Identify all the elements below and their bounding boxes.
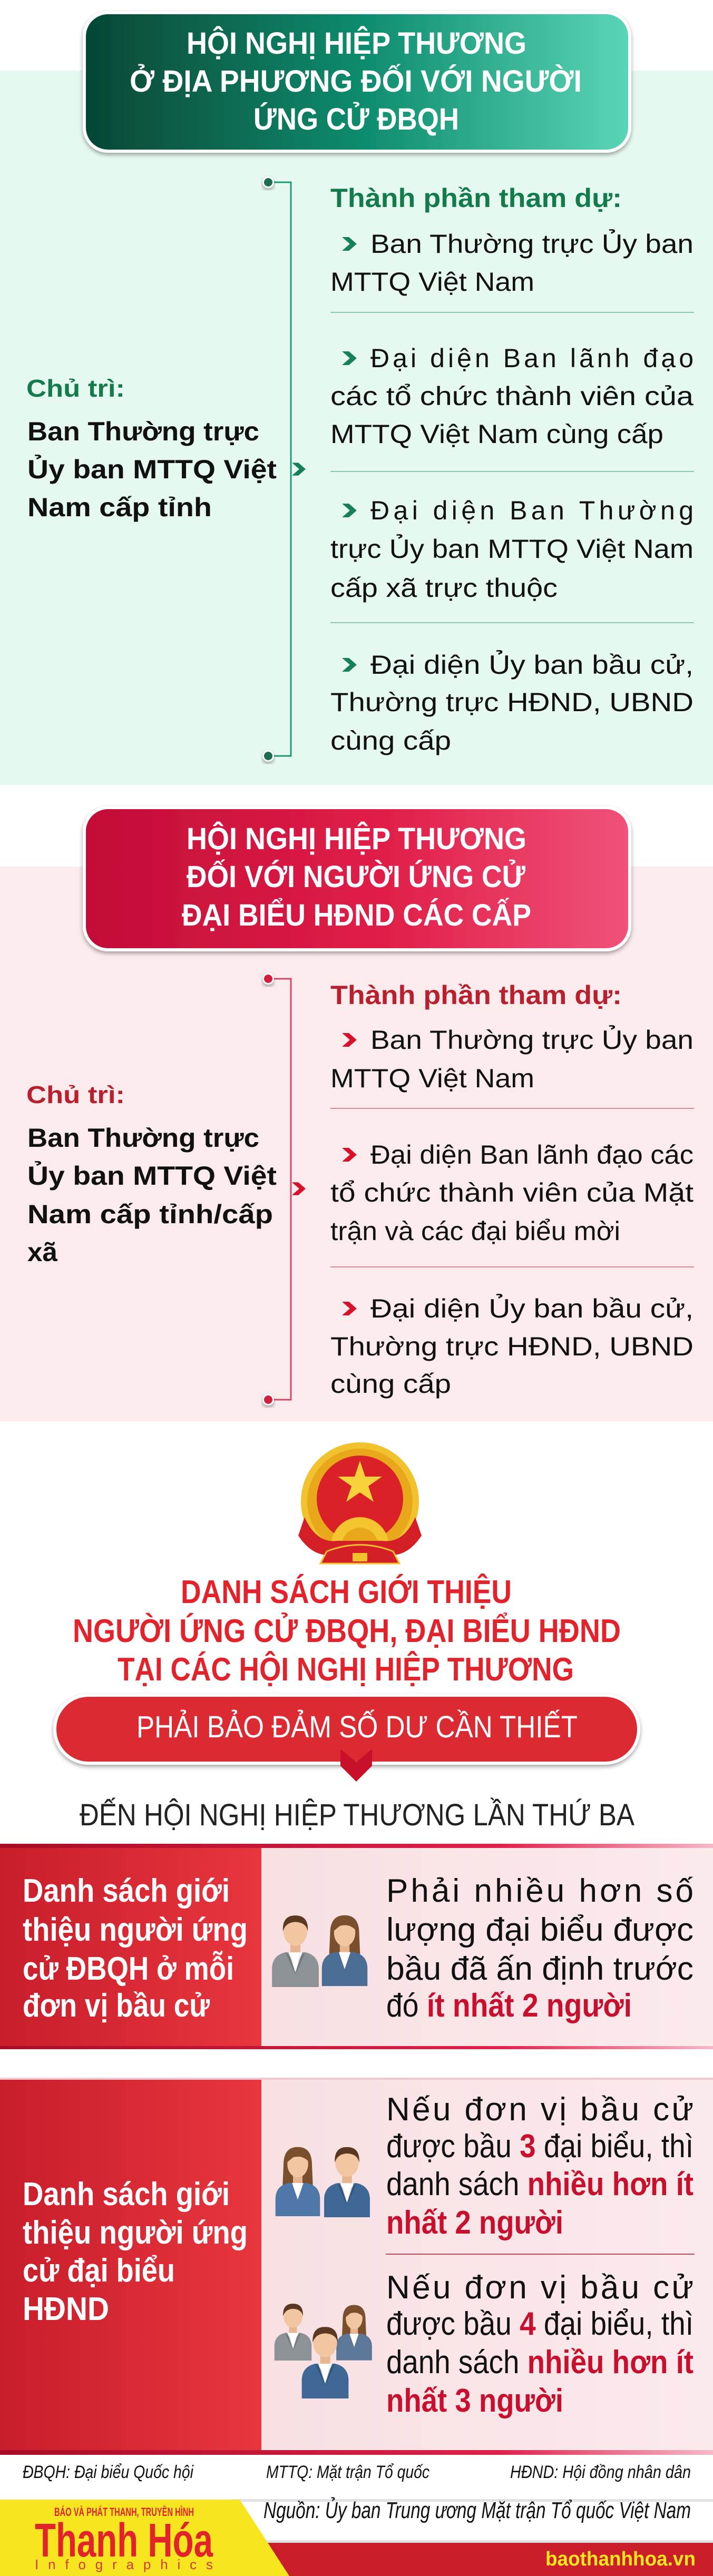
- text block: abbreviations: MTTQ: Mặt trận Tổ quốc: [266, 2462, 429, 2482]
- panel: row 2 HDND: [0, 2078, 713, 2455]
- arrow: section 2 pointer: [292, 1182, 306, 1195]
- logo: Thanh Hoa: Thanh Hóa: [35, 2514, 213, 2567]
- panel: row 1 DBQH: [0, 1844, 713, 2049]
- callout: pill requirement: PHẢI BẢO ĐẢM SỐ DƯ CẦN THIẾT: [136, 1710, 578, 1744]
- title: section 3 candidate list heading: TẠI CÁC HỘI NGHỊ HIỆP THƯƠNG: [118, 1651, 574, 1688]
- text block: 4 delegates rule: được bầu 4 đại biểu, thì: [386, 2306, 694, 2342]
- list: section 2 participants: tổ chức thành viên của Mặt: [330, 1178, 694, 1207]
- panel: row 2 HDND: thiệu người ứng: [23, 2215, 248, 2251]
- title: section 2 red banner: ĐẠI BIỂU HĐND CÁC CẤP: [182, 898, 531, 932]
- text block: section 1 chair: Ủy ban MTTQ Việt: [27, 454, 277, 484]
- panel: row 1 DBQH: đơn vị bầu cử: [23, 1988, 210, 2024]
- title: section 3 candidate list heading: [73, 1574, 621, 1688]
- icon: national emblem: [298, 1442, 422, 1564]
- text block: 4 delegates rule: Nếu đơn vị bầu cử: [386, 2269, 694, 2306]
- background: section 1 mint: [0, 71, 713, 785]
- text block: 3 delegates rule: [386, 2091, 694, 2241]
- title: section 1 green banner: ỨNG CỬ ĐBQH: [253, 102, 459, 136]
- list: section 1 participants: Đại diện Ban lãnh đạo: [370, 343, 694, 373]
- text block: section 2 chair: [26, 1081, 277, 1267]
- title: section 3 candidate list heading: DANH SÁCH GIỚI THIỆU: [181, 1574, 512, 1610]
- text block: abbreviations: [23, 2462, 691, 2482]
- text block: 4 delegates rule: danh sách nhiều hơn ít: [386, 2344, 694, 2381]
- text block: row 1 rule: bầu đã ấn định trước: [386, 1951, 694, 1987]
- text block: section 2 chair: xã: [27, 1237, 57, 1267]
- logo: Thanh Hoa: BÁO VÀ PHÁT THANH, TRUYỀN HÌNH: [54, 2505, 194, 2519]
- list: section 1 participants: Thường trực HĐND, UBND: [330, 687, 694, 717]
- text block: section 1 chair: Ban Thường trực: [27, 417, 259, 446]
- title: section 1 green banner: [84, 13, 630, 151]
- list: section 1 participants: trực Ủy ban MTTQ Việt Nam: [330, 534, 694, 564]
- text block: 4 delegates rule: nhất 3 người: [386, 2383, 563, 2419]
- list: section 1 participants: Đại diện Ban Thường: [370, 496, 694, 525]
- logo: Thanh Hoa: [35, 2505, 213, 2572]
- panel: row 2 HDND: HĐND: [23, 2291, 109, 2327]
- text block: row 1 rule: Phải nhiều hơn số: [386, 1873, 694, 1909]
- icon: two people: [272, 1915, 367, 1987]
- text block: row 1 rule: đó ít nhất 2 người: [386, 1988, 632, 2024]
- text block: 3 delegates rule: nhất 2 người: [386, 2205, 563, 2241]
- text block: section 2 chair: Nam cấp tỉnh/cấp: [27, 1199, 273, 1229]
- arrow: down chevron: [340, 1749, 372, 1782]
- list: section 2 participants: Đại diện Ủy ban bầu cử,: [370, 1293, 694, 1323]
- text block: section 2 chair: Chủ trì:: [26, 1081, 125, 1108]
- list: section 1 participants: Thành phần tham dự:: [330, 183, 622, 213]
- text block: website: baothanhhoa.vn: [545, 2548, 696, 2570]
- panel: row 2 HDND: Danh sách giới: [23, 2176, 230, 2213]
- list: section 2 participants: Thường trực HĐND, UBND: [330, 1332, 694, 1361]
- title: section 2 red banner: HỘI NGHỊ HIỆP THƯƠNG: [187, 822, 526, 856]
- panel: row 2 HDND: cử đại biểu: [23, 2253, 175, 2289]
- list: section 1 participants: cùng cấp: [330, 726, 451, 755]
- text block: row 1 rule: [386, 1873, 694, 2024]
- list: section 1 participants: Đại diện Ủy ban bầu cử,: [370, 650, 694, 680]
- title: section 2 red banner: ĐỐI VỚI NGƯỜI ỨNG CỬ: [187, 860, 526, 894]
- panel: row 1 DBQH: thiệu người ứng: [23, 1912, 248, 1948]
- arrow: section 1 pointer: [292, 463, 306, 476]
- logo: Thanh Hoa: Infographics: [35, 2557, 213, 2572]
- list: section 1 participants: cấp xã trực thuộc: [330, 573, 558, 603]
- list: section 1 participants: các tổ chức thành viên của: [330, 381, 694, 411]
- list: section 2 participants: [330, 980, 694, 1399]
- panel: row 1 DBQH: Danh sách giới: [23, 1873, 230, 1909]
- title: section 1 green banner: HỘI NGHỊ HIỆP THƯƠNG: [187, 26, 526, 61]
- text block: third conference: ĐẾN HỘI NGHỊ HIỆP THƯƠNG LẦN THỨ BA: [80, 1798, 634, 1832]
- timeline: section 2: [262, 973, 306, 1405]
- list: section 2 participants: Ban Thường trực Ủy ban: [370, 1025, 694, 1055]
- background: section 2 pink: [0, 867, 713, 1421]
- text block: row 1 rule: lượng đại biểu được: [386, 1912, 694, 1948]
- text block: 3 delegates rule: được bầu 3 đại biểu, thì: [386, 2128, 694, 2165]
- list: section 2 participants: cùng cấp: [330, 1369, 451, 1399]
- list: section 2 participants: trận và các đại biểu mời: [330, 1216, 620, 1246]
- text block: 3 delegates rule: danh sách nhiều hơn ít: [386, 2166, 694, 2203]
- list: section 1 participants: MTTQ Việt Nam cùng cấp: [330, 419, 663, 449]
- list: section 2 participants: Đại diện Ban lãnh đạo các: [370, 1140, 694, 1169]
- text block: section 1 chair: Chủ trì:: [26, 375, 125, 402]
- callout: pill requirement: [55, 1695, 639, 1782]
- footer: [0, 2496, 713, 2576]
- list: section 2 participants: MTTQ Việt Nam: [330, 1064, 534, 1093]
- list: section 2 participants: Thành phần tham dự:: [330, 980, 622, 1010]
- icon: three people: [275, 2304, 372, 2398]
- panel: row 1 DBQH: cử ĐBQH ở mỗi: [23, 1951, 234, 1987]
- icon: two people pair: [276, 2147, 370, 2217]
- title: section 3 candidate list heading: NGƯỜI ỨNG CỬ ĐBQH, ĐẠI BIỂU HĐND: [73, 1613, 621, 1649]
- text block: 4 delegates rule: [386, 2269, 694, 2419]
- timeline: section 1: [262, 176, 306, 762]
- list: section 1 participants: [330, 183, 694, 755]
- text block: section 2 chair: Ủy ban MTTQ Việt: [27, 1161, 277, 1191]
- text block: section 1 chair: Nam cấp tỉnh: [27, 493, 212, 522]
- title: section 1 green banner: Ở ĐỊA PHƯƠNG ĐỐI VỚI NGƯỜI: [130, 64, 582, 99]
- text block: section 1 chair: [26, 375, 277, 522]
- text block: 3 delegates rule: Nếu đơn vị bầu cử: [386, 2091, 694, 2128]
- text block: section 2 chair: Ban Thường trực: [27, 1123, 259, 1153]
- list: section 1 participants: MTTQ Việt Nam: [330, 267, 534, 297]
- list: section 1 participants: Ban Thường trực Ủy ban: [370, 229, 694, 259]
- title: section 2 red banner: [84, 808, 630, 950]
- text block: abbreviations: ĐBQH: Đại biểu Quốc hội: [23, 2462, 194, 2482]
